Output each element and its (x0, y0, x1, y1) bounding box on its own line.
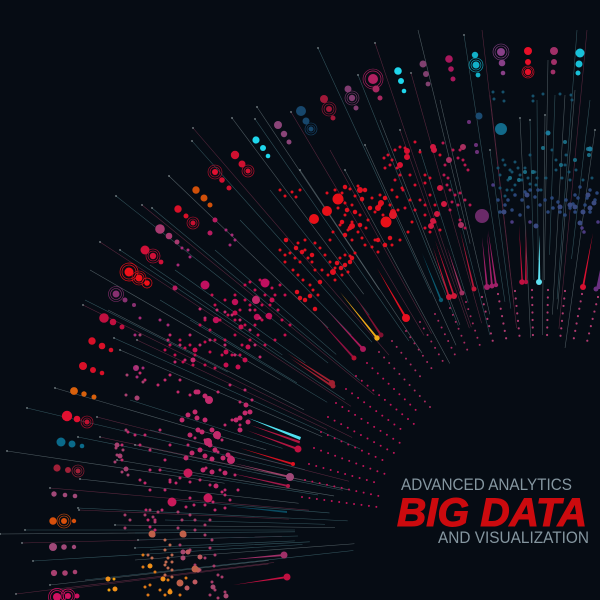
top nodes (394, 44, 584, 93)
title line: and visualization: AND VISUALIZATION (438, 529, 589, 547)
left nodes (48, 224, 180, 600)
upper left nodes (174, 69, 383, 229)
segment end dots (280, 279, 598, 580)
title (397, 476, 589, 547)
thick highlighted line segments (227, 225, 600, 585)
blue data cluster (469, 92, 598, 232)
red data cluster (280, 142, 470, 309)
crimson data cluster (135, 220, 290, 377)
pink data cluster (108, 300, 260, 598)
title line: advanced analytics: ADVANCED ANALYTICS (401, 476, 572, 494)
radial dotted rows (302, 290, 598, 507)
title line: big data: BIG DATA (397, 491, 587, 535)
